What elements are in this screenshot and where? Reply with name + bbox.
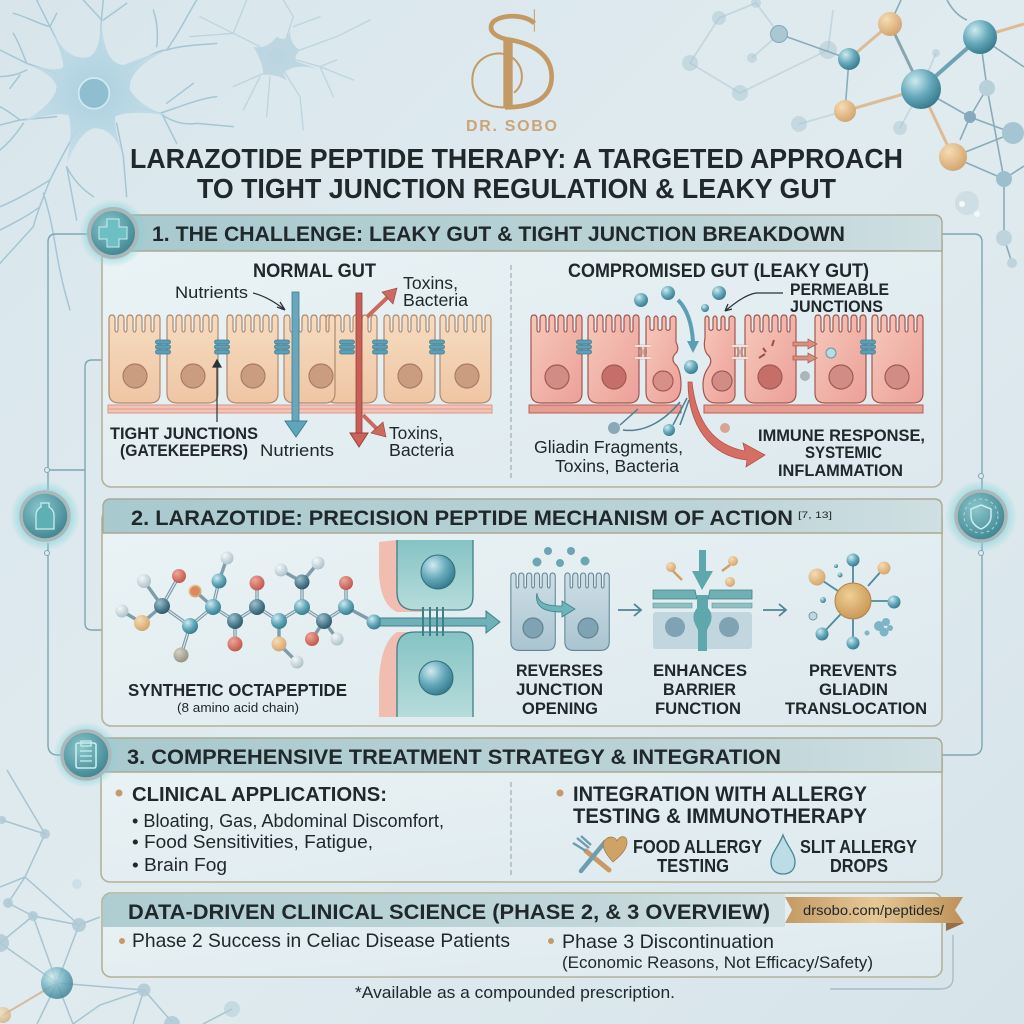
tight junctions normal — [156, 340, 444, 354]
connector lines — [44, 234, 984, 989]
section 1 heading: 1. THE CHALLENGE: LEAKY GUT & TIGHT JUNCTION BREAKDOWN — [152, 223, 845, 246]
mechanism step labels: BARRIER — [663, 681, 736, 699]
compromised membrane — [529, 405, 923, 413]
section 1 header bar — [125, 215, 942, 251]
integration heading — [556, 783, 867, 828]
arrow: step 1 to 2 — [618, 604, 641, 616]
section 2 header bar — [103, 499, 942, 533]
normal gut labels: Toxins, — [389, 423, 443, 443]
icon: enhances barrier function — [653, 550, 752, 651]
icon badge: bottle — [10, 481, 80, 551]
background: neuron cluster — [0, 0, 370, 310]
normal gut epithelial cells — [109, 315, 491, 403]
clinical applications list: CLINICAL APPLICATIONS: — [132, 784, 387, 806]
normal gut labels: Bacteria — [389, 440, 454, 460]
food allergy label: FOOD ALLERGY — [633, 837, 762, 857]
section 4 header bar — [103, 894, 785, 927]
mechanism step labels: TRANSLOCATION — [785, 700, 927, 718]
section 2 heading: 2. LARAZOTIDE: PRECISION PEPTIDE MECHANISM OF ACTION — [131, 507, 793, 530]
compromised gut labels: IMMUNE RESPONSE, — [758, 426, 925, 445]
icon: fork, knife and heart — [573, 836, 627, 871]
phase 3 bullet: Phase 3 Discontinuation — [562, 931, 774, 953]
normal gut labels: Toxins, — [403, 273, 458, 293]
leak arrows between cells — [793, 339, 817, 363]
mechanism step labels: FUNCTION — [655, 700, 741, 718]
icon badge: clipboard — [53, 722, 119, 788]
icon: reverses junction opening — [511, 547, 609, 650]
title: TO TIGHT JUNCTION REGULATION & LEAKY GUT — [197, 173, 836, 204]
icon: water drop — [771, 835, 795, 874]
footnote: *Available as a compounded prescription. — [355, 983, 675, 1002]
slit drops label — [800, 837, 917, 876]
compromised gut labels: INFLAMMATION — [778, 461, 903, 480]
arrow: immune response — [688, 382, 765, 467]
arrow: particles into gap — [678, 300, 699, 353]
title: LARAZOTIDE PEPTIDE THERAPY: A TARGETED APPROACH — [130, 143, 903, 174]
translocating particles — [608, 286, 836, 436]
background: molecule network top right — [682, 0, 1024, 268]
neuron body — [23, 20, 167, 163]
clinical applications list: • Bloating, Gas, Abdominal Discomfort, — [132, 810, 444, 831]
compromised gut labels: Toxins, Bacteria — [555, 456, 679, 476]
molecule label: (8 amino acid chain) — [177, 700, 299, 715]
url ribbon — [785, 897, 964, 931]
arrows: gliadin entering — [620, 398, 689, 430]
normal gut labels: Nutrients — [260, 441, 334, 460]
normal gut labels: TIGHT JUNCTIONS — [110, 425, 258, 443]
molecule label: SYNTHETIC OCTAPEPTIDE — [128, 680, 347, 700]
normal gut labels: (GATEKEEPERS) — [120, 442, 248, 460]
compromised gut labels: PERMEABLE — [790, 281, 889, 299]
phase 3 bullet — [548, 931, 873, 972]
arrow: toxins blocked — [350, 288, 397, 447]
compromised gut labels: SYSTEMIC — [805, 443, 882, 462]
icon badge: medical cross — [79, 199, 147, 267]
panel: 1 the challenge — [102, 215, 942, 487]
normal gut membrane — [108, 405, 492, 413]
title — [130, 143, 903, 204]
clinical applications list: • Brain Fog — [132, 854, 227, 875]
mechanism step labels: JUNCTION — [516, 681, 603, 699]
panel: 3 treatment strategy — [90, 738, 942, 882]
phase 3 bullet: (Economic Reasons, Not Efficacy/Safety) — [562, 954, 873, 972]
broken and intact junctions — [576, 340, 876, 358]
food allergy label: TESTING — [657, 856, 729, 876]
mechanism step labels: GLIADIN — [819, 681, 888, 699]
arrow: nutrients pointer — [253, 293, 285, 310]
normal gut labels — [110, 273, 468, 460]
panel: 4 clinical science — [102, 893, 942, 977]
molecule: synthetic octapeptide — [116, 552, 382, 668]
section 4 heading: DATA-DRIVEN CLINICAL SCIENCE (PHASE 2, & 3 OVERVIEW) — [128, 900, 770, 924]
mechanism step labels: REVERSES — [516, 662, 603, 680]
normal gut heading: NORMAL GUT — [253, 261, 376, 282]
mechanism step labels — [516, 662, 927, 718]
compromised gut heading: COMPROMISED GUT (LEAKY GUT) — [568, 261, 869, 282]
clinical applications list: • Food Sensitivities, Fatigue, — [132, 831, 373, 852]
citation: [7, 13] — [798, 510, 832, 520]
food allergy label — [633, 837, 762, 876]
logo: Dr. Sobo monogram — [466, 9, 557, 135]
arrow: step 2 to 3 — [763, 604, 786, 616]
normal gut labels: Bacteria — [403, 290, 468, 310]
clinical applications list — [116, 784, 444, 875]
mechanism step labels: ENHANCES — [653, 662, 747, 680]
integration heading: TESTING & IMMUNOTHERAPY — [573, 805, 867, 828]
slit drops label: SLIT ALLERGY — [800, 837, 917, 857]
arrow: permeable pointer — [725, 293, 783, 311]
compromised gut labels: Gliadin Fragments, — [534, 437, 683, 457]
arrow: tight junction pointer — [213, 360, 221, 422]
illustration: junction binding — [379, 540, 500, 717]
arrow: nutrients down — [285, 292, 307, 437]
phase 2 bullet: Phase 2 Success in Celiac Disease Patients — [132, 930, 510, 952]
normal gut labels: Nutrients — [175, 284, 248, 302]
background: molecule network bottom left — [0, 770, 240, 1024]
url ribbon: drsobo.com/peptides/ — [803, 902, 944, 918]
mechanism step labels: OPENING — [522, 700, 598, 718]
logo wordmark: DR. SOBO — [466, 118, 557, 135]
mechanism step labels: PREVENTS — [809, 662, 897, 680]
slit drops label: DROPS — [830, 856, 888, 876]
molecule label — [128, 680, 347, 715]
compromised gut labels: JUNCTIONS — [790, 298, 883, 316]
icon: prevents gliadin translocation — [808, 554, 900, 650]
compromised epithelial cells — [531, 315, 923, 403]
compromised gut labels — [534, 281, 925, 480]
section 3 heading: 3. COMPREHENSIVE TREATMENT STRATEGY & INTEGRATION — [127, 746, 781, 769]
integration heading: INTEGRATION WITH ALLERGY — [573, 783, 867, 806]
section 3 header bar — [90, 738, 942, 772]
icon badge: shield — [945, 480, 1017, 552]
panel: 2 mechanism of action — [102, 499, 942, 726]
